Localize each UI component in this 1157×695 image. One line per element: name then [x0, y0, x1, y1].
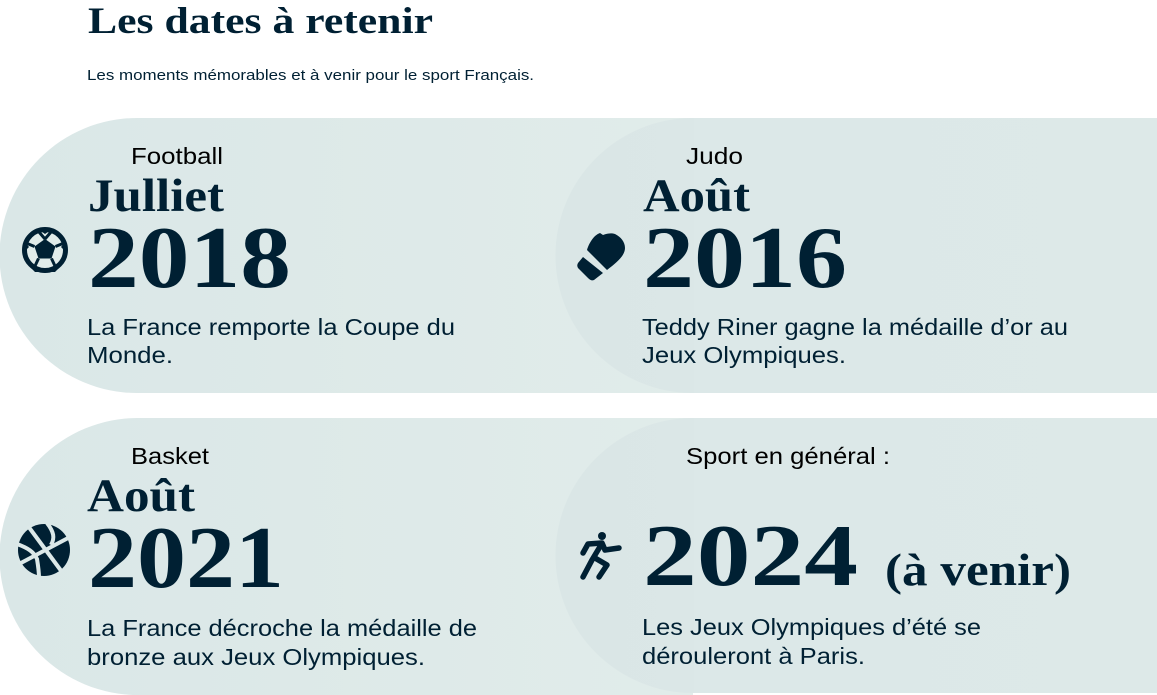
- year: 2018: 2018: [88, 210, 291, 307]
- sport label: Basket: Basket: [131, 443, 210, 469]
- panel: basket 2021: [0, 418, 693, 695]
- description: Teddy Riner gagne la médaille d’or au: [642, 314, 1068, 340]
- description: [642, 614, 981, 669]
- description: [642, 314, 1068, 368]
- description: La France décroche la médaille de: [87, 615, 477, 641]
- year: 2024: 2024: [643, 508, 858, 605]
- sport label: Sport en général :: [686, 443, 890, 469]
- year: 2021: 2021: [88, 510, 284, 607]
- icon: basketball: [17, 523, 70, 578]
- sport label: Judo: Judo: [686, 143, 743, 169]
- icon: runner: [583, 532, 619, 577]
- subtitle: Les moments mémorables et à venir pour le sport Français.: [87, 67, 534, 84]
- month: Julliet: Julliet: [88, 170, 224, 222]
- panel: sport en général 2024: [556, 418, 1157, 693]
- description: [87, 314, 455, 368]
- description: Monde.: [87, 342, 173, 368]
- panel: judo 2016: [556, 118, 1157, 393]
- icon: soccer ball: [23, 229, 67, 272]
- sport label: Football: Football: [131, 143, 223, 169]
- panel: football 2018: [0, 118, 693, 393]
- month: Août: Août: [87, 470, 195, 522]
- note: à venir: (à venir): [885, 545, 1071, 595]
- description: La France remporte la Coupe du: [87, 314, 455, 340]
- title: Les dates à retenir: [88, 1, 433, 42]
- year: 2016: 2016: [643, 210, 847, 307]
- description: [87, 615, 477, 670]
- description: Jeux Olympiques.: [642, 342, 846, 368]
- description: Les Jeux Olympiques d’été se: [642, 614, 981, 640]
- icon: boxing glove: [577, 233, 625, 280]
- description: dérouleront à Paris.: [642, 643, 865, 669]
- month: Août: Août: [643, 170, 750, 222]
- description: bronze aux Jeux Olympiques.: [87, 644, 425, 670]
